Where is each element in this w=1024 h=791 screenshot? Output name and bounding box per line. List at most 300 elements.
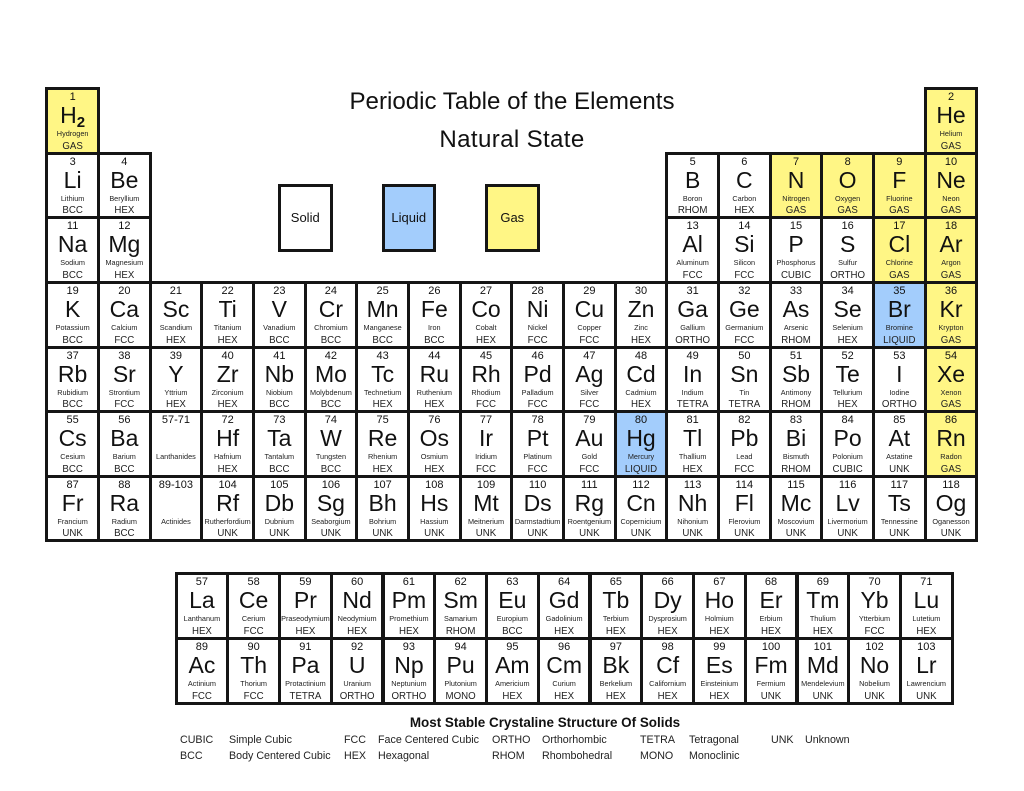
element: bismuth: Bismuth [783, 452, 809, 461]
element: dubnium: UNK [269, 528, 290, 539]
element: boron [665, 152, 720, 219]
element: mendelevium: 101 [814, 641, 832, 653]
element: plutonium: Pu [447, 652, 475, 678]
element: sulfur: Sulfur [838, 258, 857, 267]
element: chlorine [872, 216, 927, 284]
element: germanium: Germanium [725, 323, 763, 332]
element: rutherfordium: 104 [218, 479, 237, 491]
element: silicon: Silicon [734, 258, 755, 267]
element: hassium: UNK [424, 528, 445, 539]
element: helium: 2 [948, 91, 954, 103]
element: tellurium: Tellurium [833, 388, 862, 396]
element: selenium: 34 [842, 285, 854, 297]
element: hydrogen: GAS [62, 141, 83, 152]
element: protactinium: Pa [291, 652, 319, 678]
element: praseodymium [278, 572, 333, 640]
element: hydrogen: Hydrogen [57, 129, 88, 138]
element: osmium: HEX [424, 464, 444, 475]
element: rutherfordium [200, 475, 255, 542]
element: plutonium: Plutonium [444, 679, 477, 688]
element: zinc: Zinc [634, 323, 648, 332]
element: bromine [872, 281, 927, 349]
element: copernicium: UNK [631, 528, 651, 539]
element: hafnium: HEX [218, 464, 238, 475]
element: erbium: Er [760, 587, 783, 613]
element: molybdenum [304, 346, 358, 413]
element: erbium: HEX [761, 626, 781, 637]
element: gold: Au [575, 425, 603, 451]
element: neon: Neon [942, 194, 960, 203]
key: structure abbreviations: Monoclinic [689, 750, 740, 762]
element: radium: Radium [112, 517, 137, 526]
element: nickel: 28 [532, 285, 544, 297]
element: bromine: LIQUID [883, 334, 915, 346]
element: platinum: Pt [527, 425, 548, 451]
element: copper [562, 281, 617, 349]
element: chlorine: Cl [888, 231, 910, 257]
element: livermorium: UNK [837, 528, 858, 539]
element: tennessine: Tennessine [881, 517, 918, 526]
element: californium: Californium [649, 679, 686, 688]
key: structure abbreviations: Hexagonal [378, 750, 429, 762]
element: uranium: U [349, 652, 365, 678]
element: strontium: FCC [114, 399, 134, 410]
element: nobelium [847, 637, 902, 705]
element: vanadium: 23 [273, 285, 285, 297]
element: cobalt: Cobalt [475, 323, 497, 332]
element: tungsten [304, 410, 358, 478]
element: molybdenum: Mo [315, 360, 347, 386]
element: moscovium: Moscovium [778, 517, 814, 526]
element: phosphorus: Phosphorus [777, 258, 815, 267]
element: vanadium: Vanadium [263, 323, 295, 332]
element: zinc [614, 281, 668, 349]
element: silicon: FCC [734, 270, 754, 281]
element: titanium: 22 [222, 285, 234, 297]
element: americium: Americium [495, 679, 530, 688]
element: silver: FCC [579, 399, 599, 410]
element: gadolinium: 64 [558, 576, 570, 588]
element: germanium: FCC [734, 334, 754, 346]
element: lutetium: HEX [916, 626, 936, 637]
element: nickel: FCC [528, 334, 548, 346]
element: seaborgium: Sg [317, 490, 345, 516]
element: seaborgium: 106 [322, 479, 340, 491]
element: holmium [692, 572, 747, 640]
element: mercury: Hg [626, 425, 656, 451]
element: tungsten: W [320, 425, 342, 451]
element: nobelium: UNK [864, 691, 885, 702]
element: cerium [226, 572, 281, 640]
element: indium: TETRA [677, 399, 708, 410]
element: dysprosium: Dysprosium [648, 614, 687, 623]
element: beryllium: Beryllium [109, 194, 139, 203]
element: fluorine: GAS [889, 205, 910, 216]
element: sodium [45, 216, 100, 284]
element: germanium: 32 [738, 285, 750, 297]
element: iodine: ORTHO [882, 399, 917, 410]
element: antimony: Antimony [781, 388, 811, 396]
element: nihonium: Nihonium [677, 517, 708, 526]
element: rubidium: 37 [66, 350, 79, 362]
element: aluminum: Al [682, 231, 703, 257]
element: sulfur [820, 216, 875, 284]
element: erbium: 68 [765, 576, 777, 588]
element: cerium: FCC [244, 626, 264, 637]
element: ruthenium: HEX [424, 399, 444, 410]
element: meitnerium [459, 475, 513, 542]
key: structure abbreviations: RHOM [492, 750, 525, 762]
element: arsenic: As [783, 296, 809, 322]
element: sodium: BCC [62, 270, 83, 281]
element: rhenium: HEX [373, 464, 393, 475]
element: nickel: Ni [527, 296, 548, 322]
element: fluorine: Fluorine [886, 194, 913, 203]
element: protactinium [278, 637, 333, 705]
element: curium: 96 [558, 641, 570, 653]
element: terbium: Tb [602, 587, 629, 613]
key: structure abbreviations: Unknown [805, 734, 850, 746]
element: magnesium: 12 [118, 220, 130, 232]
element: fermium: Fermium [757, 679, 785, 688]
element: niobium [252, 346, 307, 413]
element: yttrium: Y [168, 360, 184, 386]
element: lanthanum: La [189, 587, 215, 613]
element: lead: Pb [730, 425, 758, 451]
element: cobalt: 27 [480, 285, 492, 297]
element: nihonium: Nh [678, 490, 707, 516]
element: copernicium: Cn [626, 490, 656, 516]
element: einsteinium: Es [706, 652, 733, 678]
element: mercury [614, 410, 668, 478]
element: bismuth: RHOM [781, 464, 811, 475]
element: oganesson: 118 [942, 479, 960, 491]
element: niobium: 41 [273, 350, 285, 362]
key: structure abbreviations: Rhombohedral [542, 750, 612, 762]
element: helium: GAS [941, 141, 961, 152]
element: samarium: Samarium [444, 614, 477, 623]
element: technetium: Technetium [364, 388, 401, 396]
element: phosphorus [769, 216, 823, 284]
element: tungsten: Tungsten [316, 452, 346, 461]
element: rhenium: Re [368, 425, 397, 451]
element: hafnium [200, 410, 255, 478]
element: polonium: 84 [842, 414, 854, 426]
element: uranium: Uranium [343, 679, 371, 688]
element: iridium: FCC [476, 464, 496, 475]
legend: gas: Gas [500, 210, 524, 225]
element: hassium: Hassium [420, 517, 449, 526]
element: nihonium [665, 475, 720, 542]
element: technetium: 43 [376, 350, 389, 362]
element: chromium: 24 [325, 285, 337, 297]
element: bromine: 35 [893, 285, 905, 297]
element: boron: RHOM [678, 205, 707, 216]
element: neon: Ne [936, 167, 966, 193]
element: zirconium: 40 [222, 350, 234, 362]
element: lawrencium: UNK [916, 691, 937, 702]
element: promethium: Promethium [389, 614, 429, 623]
element: magnesium: Magnesium [105, 258, 143, 267]
element: arsenic: 33 [790, 285, 802, 297]
element: flerovium: Flerovium [728, 517, 760, 526]
legend: liquid [382, 184, 436, 252]
element: dysprosium [640, 572, 695, 640]
element: roentgenium: Rg [575, 490, 604, 516]
element: ytterbium: 70 [868, 576, 881, 588]
element: sulfur: S [840, 231, 855, 257]
placeholder: actinides: Actinides [161, 517, 191, 526]
element: gadolinium [537, 572, 591, 640]
element: lawrencium [899, 637, 954, 705]
element: chromium: BCC [321, 334, 341, 346]
key: structure abbreviations: BCC [180, 750, 203, 762]
element: nitrogen: GAS [786, 205, 806, 216]
element: potassium [45, 281, 100, 349]
element: polonium: Polonium [832, 452, 863, 461]
element: ruthenium: Ruthenium [417, 388, 452, 396]
element: lead: FCC [734, 464, 754, 475]
element: phosphorus: 15 [790, 220, 802, 232]
element: fermium [744, 637, 798, 705]
element: astatine: Astatine [886, 452, 913, 461]
element: nickel: Nickel [528, 323, 548, 332]
element: radon: Rn [936, 425, 966, 451]
element: radium [97, 475, 152, 542]
element: thulium: HEX [813, 626, 833, 637]
element: hassium [407, 475, 462, 542]
element: hafnium: Hafnium [214, 452, 241, 461]
element: iodine [872, 346, 927, 413]
element: oxygen: 8 [845, 156, 851, 168]
element: lanthanum: 57 [196, 576, 208, 588]
element: cadmium: Cadmium [625, 388, 657, 396]
element: potassium: 19 [66, 285, 79, 297]
element: actinium: 89 [196, 641, 208, 653]
element: beryllium: 4 [121, 156, 127, 168]
element: antimony: RHOM [781, 399, 811, 410]
element: lutetium: Lu [914, 587, 939, 613]
element: indium: 49 [686, 350, 699, 362]
element: dubnium: Db [265, 490, 294, 516]
element: gallium: ORTHO [675, 334, 710, 346]
element: manganese [355, 281, 410, 349]
element: californium: HEX [658, 691, 678, 702]
element: gallium: Ga [677, 296, 708, 322]
placeholder: lanthanides [149, 410, 203, 478]
element: plutonium: MONO [446, 691, 476, 702]
element: darmstadtium: 110 [529, 479, 546, 491]
element: manganese: Mn [367, 296, 399, 322]
element: moscovium: UNK [786, 528, 806, 539]
element: thorium [226, 637, 281, 705]
element: samarium: 62 [454, 576, 467, 588]
element: thulium: Thulium [810, 614, 836, 623]
element: tantalum [252, 410, 307, 478]
element: cadmium: Cd [626, 360, 656, 386]
element: rutherfordium: Rf [216, 490, 239, 516]
legend: gas [485, 184, 540, 252]
element: oganesson [924, 475, 978, 542]
element: barium: Ba [110, 425, 138, 451]
element: europium: 63 [506, 576, 518, 588]
element: americium: HEX [502, 691, 522, 702]
element: copper: 29 [583, 285, 595, 297]
element: gallium: Gallium [680, 323, 705, 332]
element: technetium [355, 346, 410, 413]
element: niobium: Niobium [266, 388, 293, 396]
element: thorium: Th [240, 652, 267, 678]
element: iridium: Iridium [475, 452, 497, 461]
element: phosphorus: P [788, 231, 804, 257]
element: lithium [45, 152, 100, 219]
element: holmium: Holmium [705, 614, 734, 623]
key: structure abbreviations: ORTHO [492, 734, 530, 746]
element: iron [407, 281, 462, 349]
element: beryllium: HEX [114, 205, 134, 216]
element: barium: BCC [114, 464, 135, 475]
element: tungsten: 74 [325, 414, 337, 426]
element: iodine: 53 [893, 350, 905, 362]
element: tellurium: Te [835, 360, 860, 386]
element: dysprosium: HEX [658, 626, 678, 637]
element: technetium: Tc [371, 360, 394, 386]
element: chromium [304, 281, 358, 349]
element: meitnerium: 109 [477, 479, 495, 491]
element: titanium: Titanium [214, 323, 241, 332]
element: francium: 87 [66, 479, 79, 491]
element: iron: Fe [421, 296, 448, 322]
element: molybdenum: BCC [321, 399, 341, 410]
element: germanium [717, 281, 772, 349]
element: gold: Gold [582, 452, 597, 461]
legend: liquid: Liquid [391, 210, 426, 225]
element: californium: 98 [662, 641, 674, 653]
placeholder: actinides [149, 475, 203, 542]
element: fermium: Fm [754, 652, 788, 678]
key: structure abbreviations: Simple Cubic [229, 734, 292, 746]
element: cerium: 58 [248, 576, 260, 588]
element: calcium [97, 281, 152, 349]
element: sodium: Sodium [60, 258, 85, 267]
element: lithium: 3 [70, 156, 76, 168]
element: mercury: 80 [635, 414, 647, 426]
element: promethium: HEX [399, 626, 419, 637]
element: barium [97, 410, 152, 478]
element: aluminum [665, 216, 720, 284]
key: structure abbreviations: FCC [344, 734, 366, 746]
element: dubnium: 105 [270, 479, 288, 491]
element: darmstadtium: UNK [527, 528, 548, 539]
element: bohrium: UNK [372, 528, 393, 539]
element: bismuth: 83 [790, 414, 802, 426]
element: iron: Iron [428, 323, 441, 332]
element: silicon [717, 216, 772, 284]
element: cesium: BCC [62, 464, 83, 475]
element: tin: 50 [738, 350, 750, 362]
element: gold [562, 410, 617, 478]
element: vanadium: V [272, 296, 287, 322]
element: darmstadtium: Darmstadtium [515, 517, 560, 526]
element: barium: 56 [118, 414, 130, 426]
element: dubnium: Dubnium [265, 517, 294, 526]
element: tin: TETRA [728, 399, 760, 410]
element: roentgenium [562, 475, 617, 542]
element: neptunium: Neptunium [391, 679, 427, 688]
key: structure abbreviations: TETRA [640, 734, 675, 746]
element: xenon: GAS [941, 399, 961, 410]
element: thulium: 69 [817, 576, 829, 588]
element: boron: B [685, 167, 700, 193]
element: polonium: Po [834, 425, 862, 451]
element: protactinium: TETRA [290, 691, 321, 702]
element: neodymium: Neodymium [338, 614, 377, 623]
element: palladium [510, 346, 565, 413]
element: seaborgium [304, 475, 358, 542]
element: lutetium: Lutetium [912, 614, 940, 623]
element: bohrium: Bohrium [369, 517, 396, 526]
element: bromine: Bromine [886, 323, 913, 332]
element: fermium: 100 [762, 641, 780, 653]
element: gallium: 31 [686, 285, 699, 297]
element: vanadium: BCC [269, 334, 290, 346]
element: iodine: I [896, 360, 903, 386]
element: argon: 18 [945, 220, 957, 232]
element: roentgenium: Roentgenium [568, 517, 611, 526]
element: barium: Barium [113, 452, 136, 461]
element: thorium: Thorium [240, 679, 267, 688]
element: radon: 86 [945, 414, 957, 426]
element: selenium: HEX [838, 334, 858, 346]
element: rhodium: Rh [471, 360, 501, 386]
element: berkelium: Bk [602, 652, 629, 678]
element: manganese: BCC [372, 334, 393, 346]
element: ruthenium: Ru [420, 360, 449, 386]
element: rhenium [355, 410, 410, 478]
element: americium: Am [495, 652, 530, 678]
element: holmium: 67 [713, 576, 725, 588]
element: lutetium [899, 572, 954, 640]
element: rhodium: 45 [480, 350, 492, 362]
element: hydrogen: H2 [60, 102, 85, 131]
key heading: Most Stable Crystaline Structure Of Solids [410, 715, 680, 730]
element: holmium: Ho [705, 587, 734, 613]
element: magnesium: Mg [108, 231, 140, 257]
element: chromium: Cr [319, 296, 343, 322]
element: neptunium: ORTHO [392, 691, 426, 702]
element: ytterbium: Ytterbium [859, 614, 890, 623]
element: tennessine: UNK [889, 528, 910, 539]
element: cerium: Cerium [242, 614, 265, 623]
element: promethium [382, 572, 436, 640]
element: hafnium: Hf [216, 425, 239, 451]
key: structure abbreviations [180, 734, 850, 762]
element: roentgenium: 111 [581, 479, 598, 491]
element: helium: Helium [940, 129, 962, 138]
element: platinum: Platinum [523, 452, 552, 461]
element: oganesson: Oganesson [932, 517, 970, 526]
element: xenon [924, 346, 978, 413]
element: strontium [97, 346, 152, 413]
element: tantalum: Tantalum [265, 452, 294, 461]
key: structure abbreviations: CUBIC [180, 734, 213, 746]
element: titanium [200, 281, 255, 349]
element: aluminum: FCC [683, 270, 703, 281]
element: zirconium: HEX [218, 399, 238, 410]
element: protactinium: 91 [299, 641, 312, 653]
element: copper: Copper [577, 323, 601, 332]
element: californium [640, 637, 695, 705]
